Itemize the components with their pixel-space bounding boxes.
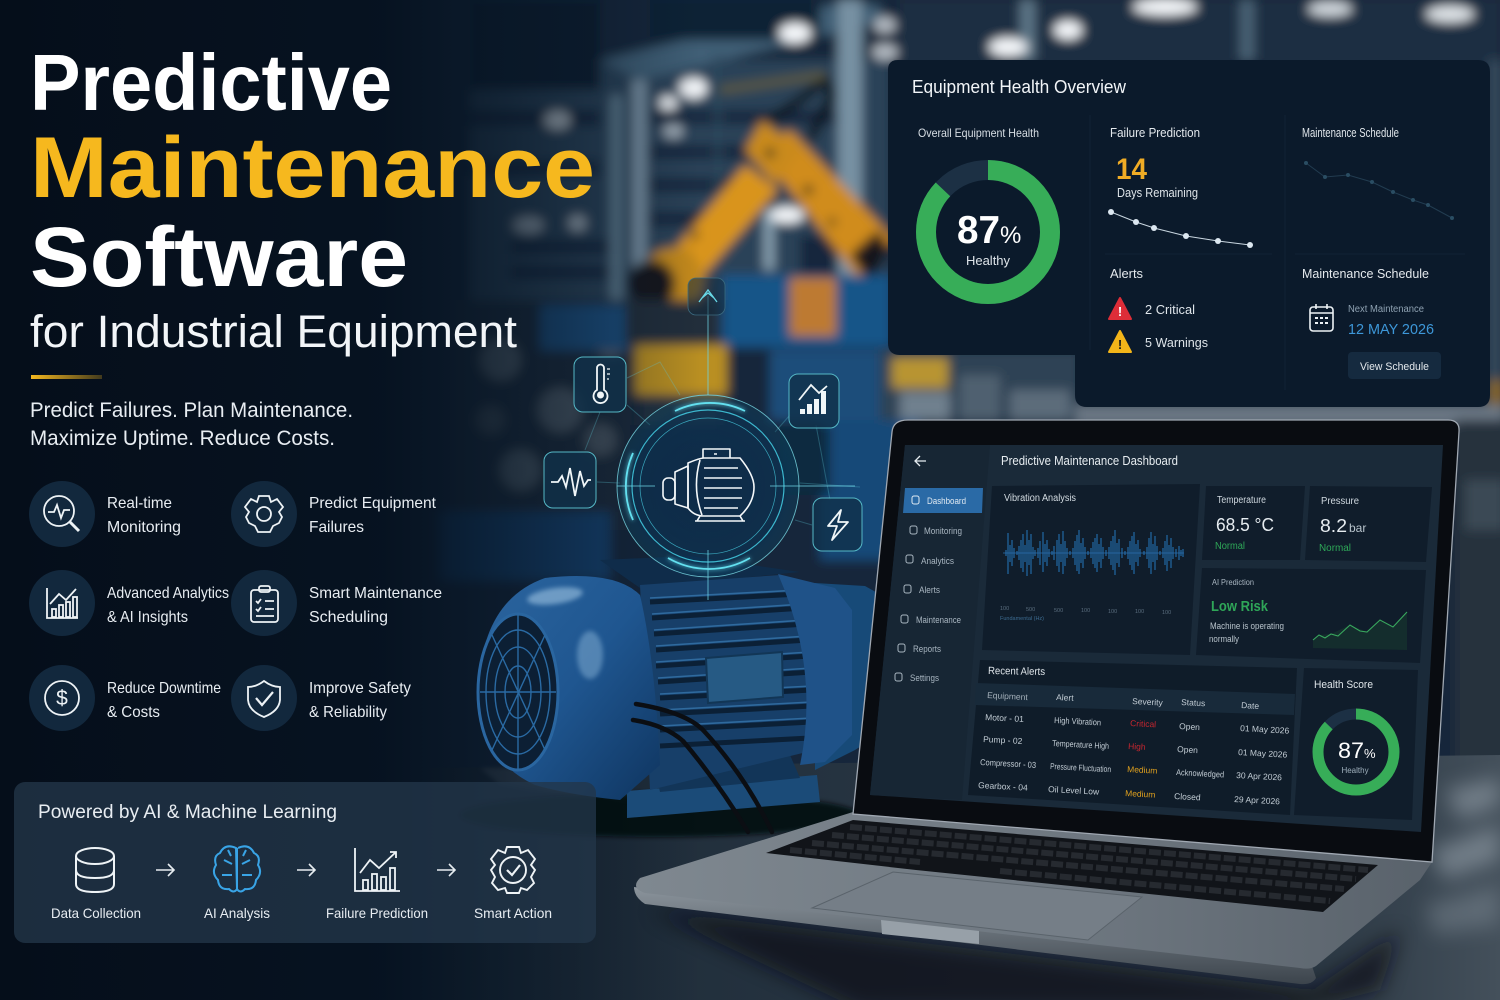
recent alerts table: 01 May 2026 <box>1238 747 1288 760</box>
feature: safety <box>231 665 411 731</box>
feature: scheduling: Smart Maintenance <box>309 585 442 602</box>
icon: prediction chart <box>355 848 400 891</box>
failure prediction: Failure Prediction <box>1110 126 1200 140</box>
AI prediction card: Machine is operating <box>1210 621 1284 631</box>
motor finned body <box>640 575 815 790</box>
vibration waveform <box>1003 530 1183 576</box>
subtitle: Predict Failures. Plan Maintenance. <box>30 399 353 422</box>
holographic HUD <box>544 278 862 600</box>
overall health donut: 87 <box>957 209 1000 252</box>
title: Software <box>30 210 408 304</box>
feature: safety: & Reliability <box>309 704 387 721</box>
icon box: lightning bolt <box>813 498 862 551</box>
feature: real-time monitoring: Real-time <box>107 495 172 512</box>
recent alerts table: Alert <box>1056 692 1075 703</box>
touchpad <box>812 872 1142 940</box>
feature: real-time monitoring: Monitoring <box>107 519 181 536</box>
alerts: 5 Warnings <box>1145 335 1208 350</box>
dashboard title: Predictive Maintenance Dashboard <box>1001 454 1178 468</box>
alerts <box>1109 266 1208 352</box>
sidebar navigation: Analytics <box>921 556 954 566</box>
recent alerts table: Recent Alerts <box>988 665 1045 678</box>
feature: analytics <box>29 570 229 636</box>
laptop shadow <box>650 910 1400 1000</box>
back arrow <box>915 456 926 466</box>
feature: analytics: Advanced Analytics <box>107 585 229 602</box>
failure prediction: 14 <box>1116 153 1147 186</box>
health score card <box>1294 668 1418 820</box>
recent alerts table <box>968 660 1297 815</box>
panel: equipment health overview <box>888 60 1490 407</box>
laptop screen <box>870 445 1443 832</box>
flow labels: Smart Action <box>474 905 552 921</box>
feature: reduce costs: $ <box>56 687 68 710</box>
sidebar navigation: Alerts <box>919 585 940 595</box>
motor fan grille <box>478 614 558 770</box>
title <box>30 38 595 357</box>
temperature card <box>1202 486 1305 560</box>
recent alerts table: 29 Apr 2026 <box>1234 794 1280 806</box>
icon: database <box>76 848 114 892</box>
vibration analysis card: 100 <box>1000 606 1009 612</box>
vibration analysis card: 100 <box>1108 609 1117 615</box>
temperature card: Normal <box>1215 541 1245 552</box>
flow arrows <box>156 864 455 876</box>
title accent line <box>31 375 102 379</box>
overall health donut: Overall Equipment Health <box>918 126 1039 140</box>
temperature card: Temperature <box>1217 495 1266 506</box>
pressure card <box>1305 486 1432 562</box>
recent alerts table: Closed <box>1174 791 1201 802</box>
sidebar navigation: Maintenance <box>916 615 961 625</box>
recent alerts table: Compressor - 03 <box>980 757 1037 770</box>
overall health donut <box>918 126 1050 294</box>
recent alerts table: Medium <box>1127 764 1158 776</box>
connector lines <box>585 362 860 525</box>
factory lights <box>513 0 1474 233</box>
left table highlight <box>480 768 630 800</box>
feature: scheduling: Scheduling <box>309 609 388 626</box>
recent alerts table: Critical <box>1130 718 1156 729</box>
motor rear gearbox <box>815 583 890 770</box>
title: for Industrial Equipment <box>30 306 518 357</box>
sidebar navigation: Reports <box>913 644 941 654</box>
feature: predict failures <box>231 481 437 547</box>
flow labels: Failure Prediction <box>326 905 428 921</box>
overall health donut: Healthy <box>966 253 1011 268</box>
background machinery <box>450 300 630 530</box>
feature: predict failures: Failures <box>309 519 364 536</box>
sidebar navigation: Dashboard <box>927 496 966 506</box>
recent alerts table: 30 Apr 2026 <box>1236 770 1282 782</box>
recent alerts table: High Vibration <box>1054 715 1102 727</box>
front notch <box>881 920 979 944</box>
recent alerts table: Equipment <box>987 690 1029 702</box>
recent alerts table: Acknowledged <box>1176 767 1225 780</box>
title: Predictive <box>30 38 392 127</box>
panel heading: Equipment Health Overview <box>912 77 1127 97</box>
recent alerts table: High <box>1128 741 1146 752</box>
icon box: thermometer <box>574 357 626 412</box>
HUD circle <box>617 296 855 600</box>
flow labels: Data Collection <box>51 905 141 921</box>
failure prediction <box>1108 126 1253 248</box>
temperature card: 68.5 °C <box>1216 515 1274 535</box>
electric motor <box>460 556 890 837</box>
recent alerts table: Pressure Fluctuation <box>1050 761 1112 774</box>
icon: motor outline <box>663 449 754 521</box>
pressure card: bar <box>1349 521 1366 535</box>
vibration analysis card: Fundamental (Hz) <box>1000 616 1044 622</box>
feature: scheduling <box>231 570 442 636</box>
dividers <box>1090 115 1465 390</box>
sidebar navigation: Settings <box>910 673 939 683</box>
feature: predict failures: Predict Equipment <box>309 495 437 512</box>
recent alerts table: Pump - 02 <box>983 734 1023 746</box>
feature: reduce costs: & Costs <box>107 704 160 721</box>
recent alerts table: Severity <box>1132 696 1164 708</box>
vibration analysis card: 100 <box>1135 609 1144 615</box>
icon box: vibration wave <box>544 452 596 508</box>
sidebar navigation: Monitoring <box>924 526 962 536</box>
recent alerts table: Oil Level Low <box>1048 784 1100 797</box>
AI prediction card: AI Prediction <box>1212 577 1254 587</box>
next maintenance: Next Maintenance <box>1348 304 1424 315</box>
recent alerts table: Motor - 01 <box>985 712 1024 724</box>
vibration analysis card: 500 <box>1054 608 1063 614</box>
vibration analysis card: Vibration Analysis <box>1004 493 1076 504</box>
title: Maintenance <box>30 120 595 216</box>
icon: smart action gear <box>491 847 535 893</box>
recent alerts table: Temperature High <box>1052 738 1110 751</box>
icon: AI brain <box>214 846 260 892</box>
overall health donut: % <box>1000 222 1021 249</box>
subtitle: Maximize Uptime. Reduce Costs. <box>30 427 335 450</box>
recent alerts table: 01 May 2026 <box>1240 723 1290 736</box>
vibration analysis card <box>982 484 1200 655</box>
next maintenance: 12 MAY 2026 <box>1348 321 1434 338</box>
health score card: Healthy <box>1341 766 1369 775</box>
pressure card: 8.2 <box>1320 516 1347 536</box>
laptop front edge <box>634 887 1316 984</box>
recent alerts table: Date <box>1241 700 1260 711</box>
subtitle <box>30 399 353 450</box>
vibration analysis card: 500 <box>1026 607 1035 613</box>
recent alerts table: Status <box>1181 697 1205 708</box>
keyboard <box>766 820 1378 912</box>
alerts: 2 Critical <box>1145 302 1195 317</box>
yellow robot arm <box>627 75 895 312</box>
flow labels: AI Analysis <box>204 905 270 921</box>
laptop base <box>636 812 1432 969</box>
motor fan cap <box>478 576 660 800</box>
table reflections <box>1425 778 1500 935</box>
failure prediction: Days Remaining <box>1117 186 1198 200</box>
next maintenance: Maintenance Schedule <box>1302 266 1429 281</box>
laptop lid <box>853 420 1459 862</box>
flow labels <box>51 905 552 921</box>
AI prediction card: Low Risk <box>1211 599 1269 615</box>
next maintenance <box>1302 266 1441 379</box>
motor nameplate <box>706 652 783 703</box>
feature: reduce costs: Reduce Downtime <box>107 680 221 697</box>
laptop <box>634 420 1459 1000</box>
motor top plate <box>600 556 800 588</box>
health score card: Health Score <box>1314 679 1373 691</box>
recent alerts table: Open <box>1177 744 1198 755</box>
icon box: up arrow <box>688 278 725 315</box>
alerts: ! <box>1118 304 1122 319</box>
alerts: ! <box>1118 337 1122 352</box>
left dark overlay <box>0 0 700 1000</box>
pressure card: Pressure <box>1321 496 1359 507</box>
AI prediction card: normally <box>1209 634 1239 644</box>
pressure card: Normal <box>1319 543 1351 554</box>
health score card: 87 <box>1338 738 1364 763</box>
sidebar <box>870 445 990 800</box>
panel: powered by AI <box>14 782 596 943</box>
sidebar navigation <box>895 488 983 683</box>
panel heading: Powered by AI & Machine Learning <box>38 802 337 823</box>
motor power cables <box>633 704 772 832</box>
recent alerts table: Gearbox - 04 <box>978 780 1028 793</box>
feature: analytics: & AI Insights <box>107 609 188 626</box>
health score card: % <box>1364 746 1376 761</box>
icon box: analytics bars <box>789 374 839 428</box>
maintenance schedule sparkline <box>1302 126 1454 220</box>
feature: real-time monitoring <box>29 481 181 547</box>
AI prediction card <box>1196 568 1426 663</box>
vibration analysis card: 100 <box>1081 608 1090 614</box>
motor end bell <box>778 574 852 765</box>
alerts: Alerts <box>1110 266 1143 281</box>
motor base <box>627 775 820 818</box>
recent alerts table: Open <box>1179 721 1200 732</box>
vibration analysis card: 100 <box>1162 610 1171 616</box>
feature: reduce costs <box>29 665 221 731</box>
table surface <box>430 755 1500 1000</box>
next maintenance: View Schedule <box>1360 361 1429 373</box>
feature: safety: Improve Safety <box>309 680 411 697</box>
motor shadow <box>460 793 860 837</box>
recent alerts table: Medium <box>1125 788 1156 800</box>
maintenance schedule sparkline: Maintenance Schedule <box>1302 126 1399 140</box>
